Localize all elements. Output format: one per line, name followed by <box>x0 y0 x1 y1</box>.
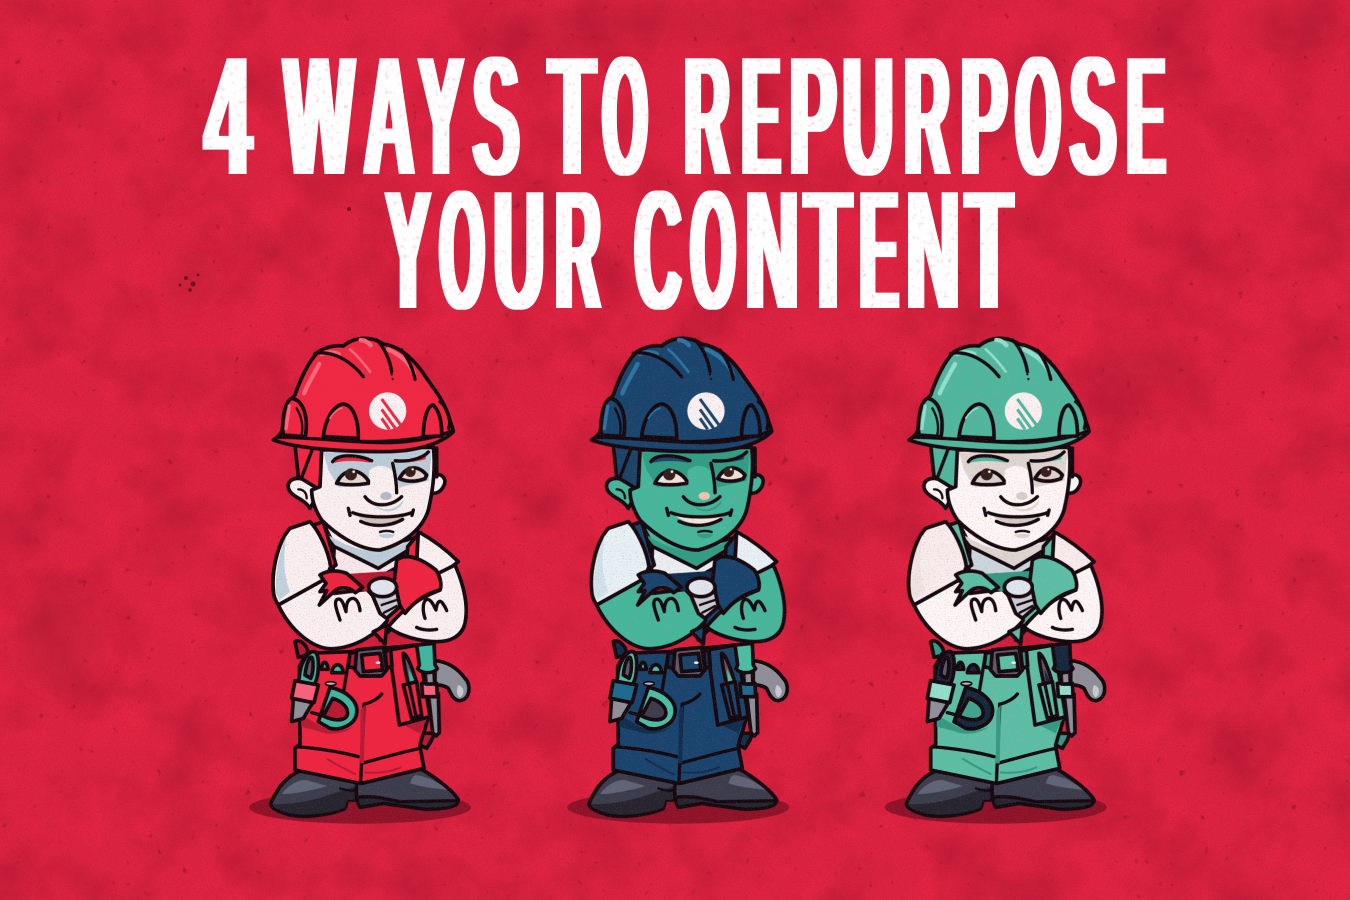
hands and watch <box>319 557 441 644</box>
boots <box>906 767 1094 816</box>
title line 1: U <box>842 18 893 213</box>
belt buckle <box>348 647 392 676</box>
title line 2: O <box>440 152 484 347</box>
hammer <box>435 661 469 701</box>
belt buckle <box>984 647 1028 676</box>
head <box>606 445 763 550</box>
title line 2: U <box>494 152 544 347</box>
title line 2: R <box>555 152 601 347</box>
trousers <box>295 641 428 783</box>
carabiner clip <box>312 682 357 729</box>
left arm <box>909 522 1023 649</box>
hands and watch <box>638 557 759 644</box>
carabiner clip <box>947 682 993 729</box>
hard hat <box>909 338 1089 452</box>
right arm <box>707 532 785 642</box>
title line 2: Y <box>385 152 430 347</box>
worker: mint overalls <box>885 338 1107 824</box>
screwdriver <box>735 643 758 736</box>
hammer <box>753 661 787 701</box>
title line 2: N <box>745 152 798 347</box>
right arm <box>1024 532 1102 642</box>
hard hat <box>273 338 453 452</box>
title line 1: E <box>741 18 780 213</box>
title line 2 <box>384 152 1016 347</box>
title line 2: T <box>805 152 851 347</box>
hammer <box>1071 661 1105 701</box>
left arm <box>591 522 706 649</box>
title line 2: O <box>690 152 735 347</box>
pliers holster <box>292 652 343 722</box>
hands and watch <box>955 557 1077 644</box>
head <box>924 445 1081 550</box>
head <box>288 445 445 550</box>
trousers <box>613 641 747 783</box>
torso and straps <box>308 522 440 640</box>
tool pouch <box>708 645 752 748</box>
title line 1 <box>202 18 1166 304</box>
trousers <box>931 641 1064 783</box>
carabiner clip <box>630 682 675 729</box>
ground shadow <box>249 791 471 824</box>
title line 1: S <box>472 18 519 213</box>
tool pouch <box>389 645 434 748</box>
title line 1: P <box>961 18 1007 213</box>
title line 1: S <box>1069 18 1116 213</box>
title line 1: 4 <box>205 18 251 213</box>
title line 1: W <box>284 18 354 213</box>
pliers holster <box>927 652 979 722</box>
worker: navy overalls <box>567 338 789 824</box>
title line 1: R <box>684 18 730 213</box>
title line 1: Y <box>418 18 464 213</box>
left arm <box>273 522 387 649</box>
hard hat <box>592 338 772 452</box>
title line 2: C <box>635 152 681 347</box>
pliers holster <box>610 652 662 722</box>
title line 2: E <box>860 152 898 347</box>
right arm <box>388 532 466 642</box>
title line 1: O <box>1015 18 1060 213</box>
title <box>202 18 1166 347</box>
ground shadow <box>885 791 1107 824</box>
title line 2: T <box>966 152 1012 347</box>
ground shadow <box>567 791 789 824</box>
screwdriver <box>1052 643 1075 736</box>
title line 1: E <box>1127 18 1165 213</box>
belt buckle <box>667 647 710 676</box>
title line 1: T <box>549 18 595 213</box>
title line 2: N <box>907 152 959 347</box>
torso and straps <box>627 522 758 640</box>
title line 1: R <box>904 18 950 213</box>
torso and straps <box>944 522 1076 640</box>
title line 1: O <box>603 18 647 213</box>
boots <box>271 767 458 816</box>
worker: red overalls <box>249 338 471 824</box>
title line 1: P <box>790 18 836 213</box>
screwdriver <box>417 643 439 736</box>
title line 1: A <box>363 18 414 213</box>
boots <box>589 767 777 816</box>
tool pouch <box>1025 645 1070 748</box>
